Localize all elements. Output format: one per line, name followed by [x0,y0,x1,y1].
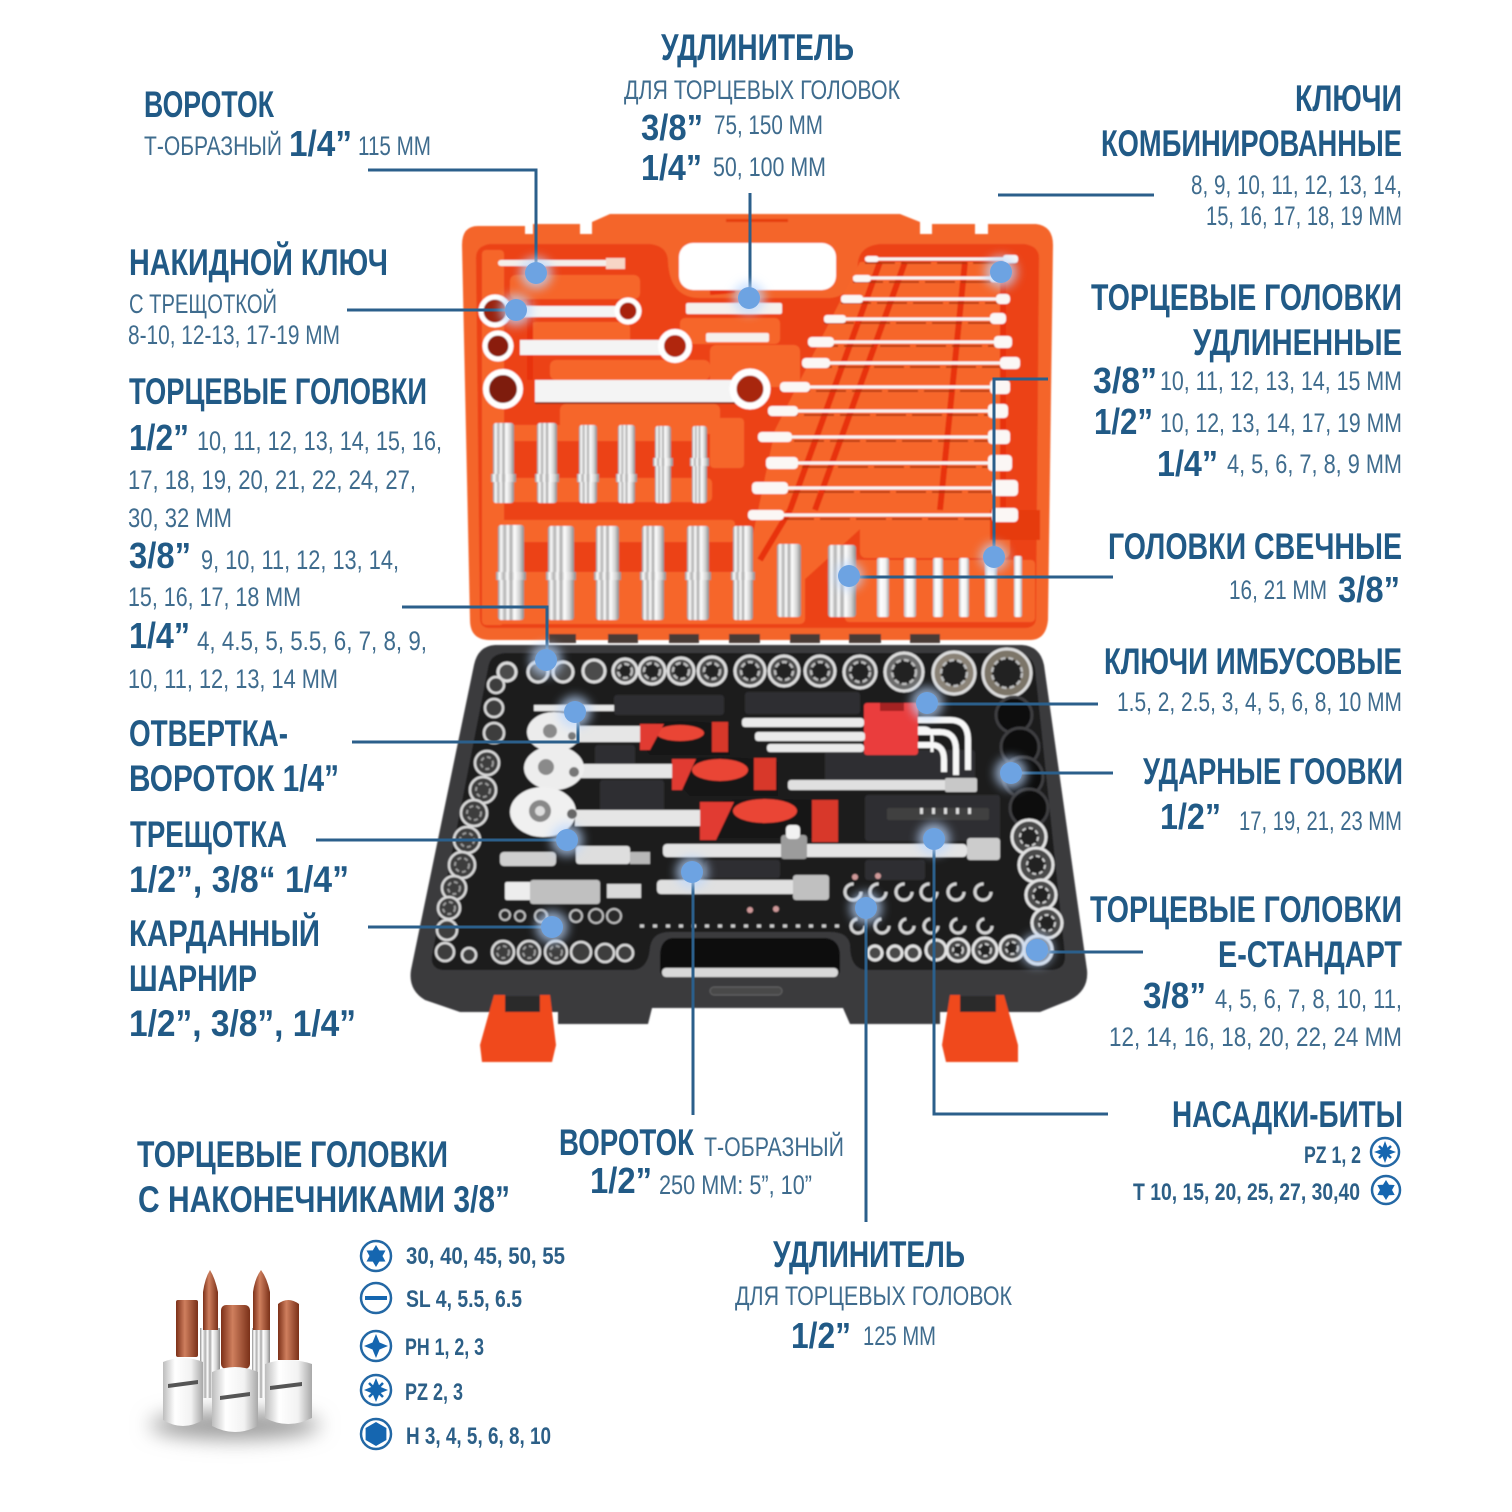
top row sockets [498,649,1031,697]
label: long sockets: 1/4” [1157,443,1218,484]
label: ratchet ring wrench: С ТРЕЩОТКОЙ [129,288,277,319]
label: sockets: 3/8” [129,535,191,576]
label: bits: PZ 1, 2 [1304,1142,1361,1169]
label: long sockets: 10, 12, 13, 14, 17, 19 ММ [1160,408,1402,438]
label: T-handle 1/4: Т-ОБРАЗНЫЙ [144,130,282,161]
label: T-handle 1/4 [144,84,431,164]
row of small bits [640,924,846,928]
label: sockets [128,371,442,694]
hex keys [864,703,968,775]
label: universal joint: 1/2”, 3/8”, 1/4” [129,1003,356,1044]
lid orange foam blocks [482,250,1035,625]
label: ratchet ring wrench: НАКИДНОЙ КЛЮЧ [129,241,388,283]
label: sockets: 10, 11, 12, 13, 14 ММ [128,664,338,694]
label: bit sockets heading [137,1134,510,1220]
label: sockets: 30, 32 ММ [128,503,232,533]
label: hex keys: КЛЮЧИ ИМБУСОВЫЕ [1104,641,1402,682]
label: T-handle 1/2: 1/2” [590,1160,652,1201]
label: long sockets [1091,277,1402,484]
label: spark plug sockets [1108,526,1402,610]
bit sockets photo [150,1270,320,1439]
label: extension bottom [735,1234,1012,1356]
label: long sockets: 1/2” [1094,401,1153,442]
label: extension top: ДЛЯ ТОРЦЕВЫХ ГОЛОВОК [624,75,900,105]
label: long sockets: УДЛИНЕННЫЕ [1193,322,1402,363]
small sockets [500,909,621,923]
label: sockets: 4, 4.5, 5, 5.5, 6, 7, 8, 9, [197,626,427,656]
label: ratchet: ТРЕЩОТКА [130,814,287,855]
label: universal joint: ШАРНИР [129,958,257,999]
label: T-handle 1/2: Т-ОБРАЗНЫЙ [704,1131,844,1162]
label: hex keys [1104,641,1402,717]
label: T-handle 1/2 [559,1122,844,1201]
legend row: torx [361,1241,565,1271]
label: long sockets: 3/8” [1093,360,1157,401]
legend row: pozidriv: PZ 2, 3 [405,1379,463,1406]
orange latches [480,995,1018,1062]
label: extension top: 1/4” [641,147,702,188]
impact sockets [996,697,1048,827]
label: impact sockets: 1/2” [1160,796,1221,837]
label: spark plug sockets: 16, 21 ММ [1229,575,1327,605]
label: E-standard sockets: 12, 14, 16, 18, 20, 22, 24 ММ [1109,1022,1402,1052]
label: ratchet [129,814,349,900]
lid bottom hinge tabs [549,634,940,643]
ratchet ring wrenches [481,297,767,406]
label: ratchet: 1/2”, 3/8“ 1/4” [129,859,349,900]
socket bit holders [845,884,992,933]
label: impact sockets [1143,751,1403,837]
spark plug and small sockets [877,556,1022,617]
icon: pozidriv [1371,1138,1399,1166]
ratchets [510,712,838,842]
connector lines [316,170,1154,1222]
label: impact sockets: УДАРНЫЕ ГООВКИ [1143,751,1403,792]
label: sockets: 17, 18, 19, 20, 21, 22, 24, 27, [128,465,416,495]
lid handle opening [679,243,836,290]
legend row: pozidriv [361,1375,463,1406]
label: bits: T 10, 15, 20, 25, 27, 30,40 [1133,1179,1360,1206]
long sockets upper row [491,423,709,503]
label: E-standard sockets: 3/8” [1143,975,1206,1016]
label: extension bottom: 125 ММ [863,1321,936,1351]
top row socket bores [618,658,1022,688]
label: sockets: 10, 11, 12, 13, 14, 15, 16, [197,426,442,456]
long sockets lower row [496,525,856,620]
label: sockets: 1/2” [129,417,189,458]
lid red grooves [530,262,1003,560]
E-standard sockets [868,820,1062,964]
label: extension top: 3/8” [641,107,703,148]
combination wrenches [748,255,1020,522]
label: extension top [624,27,900,188]
label: extension top: 75, 150 ММ [714,110,823,140]
label: long sockets: 10, 11, 12, 13, 14, 15 ММ [1160,366,1402,396]
label: screwdriver: ВОРОТОК 1/4” [129,758,339,799]
label: T-handle 1/2: 250 ММ: 5”, 10” [659,1170,812,1200]
label: hex keys: 1.5, 2, 2.5, 3, 4, 5, 6, 8, 10 ММ [1117,687,1402,717]
bits block [887,808,989,820]
label: screwdriver: ОТВЕРТКА- [129,713,288,754]
label: E-standard sockets: ТОРЦЕВЫЕ ГОЛОВКИ [1090,889,1402,930]
label: long sockets: ТОРЦЕВЫЕ ГОЛОВКИ [1091,277,1402,318]
label: combination wrenches [1101,78,1402,231]
label: spark plug sockets: 3/8” [1338,569,1400,610]
label: sockets: ТОРЦЕВЫЕ ГОЛОВКИ [129,371,427,412]
label: ratchet ring wrench: 8-10, 12-13, 17-19 ММ [128,320,340,350]
E-standard socket stars [953,828,1055,956]
label: impact sockets: 17, 19, 21, 23 ММ [1239,806,1402,836]
label: sockets: 15, 16, 17, 18 ММ [128,582,301,612]
label: bit sockets heading: С НАКОНЕЧНИКАМИ 3/8” [138,1179,510,1220]
T-handle in lid [498,258,625,269]
legend row: slotted [361,1283,522,1313]
case base: black lower half [411,645,1087,1062]
label: sockets: 1/4” [129,615,190,656]
legend row: phillips [361,1331,484,1361]
label: T-handle 1/4: ВОРОТОК [144,84,274,125]
label: E-standard sockets: Е-СТАНДАРТ [1218,934,1402,975]
label: combination wrenches: 8, 9, 10, 11, 12, 13, 14, [1191,170,1402,200]
label: universal joint: КАРДАННЫЙ [129,912,320,954]
label: bits [1133,1094,1403,1206]
label: extension bottom: ДЛЯ ТОРЦЕВЫХ ГОЛОВОК [735,1281,1012,1311]
label: bits: НАСАДКИ-БИТЫ [1172,1094,1403,1135]
label: E-standard sockets [1090,889,1402,1052]
label: ratchet ring wrench [128,241,388,350]
bit type legend [361,1241,565,1450]
legend row: torx: 30, 40, 45, 50, 55 [406,1243,565,1270]
tool case [411,214,1087,1062]
screwdriver handle [534,705,614,711]
label: extension top: 50, 100 ММ [713,152,826,182]
label: long sockets: 4, 5, 6, 7, 8, 9 ММ [1227,449,1402,479]
label: T-handle 1/4: 1/4” [289,123,352,164]
label: bit sockets heading: ТОРЦЕВЫЕ ГОЛОВКИ [137,1134,448,1175]
label: T-handle 1/4: 115 ММ [358,131,431,161]
legend row: hex [361,1419,551,1450]
legend row: slotted: SL 4, 5.5, 6.5 [406,1286,522,1313]
left and bottom socket rows [436,677,633,963]
universal joints [500,846,650,904]
label: sockets: 9, 10, 11, 12, 13, 14, [201,545,399,575]
label: T-handle 1/2: ВОРОТОК [559,1122,694,1163]
foam blocks [595,692,1000,880]
label: E-standard sockets: 4, 5, 6, 7, 8, 10, 11, [1215,984,1402,1014]
label: combination wrenches: КОМБИНИРОВАННЫЕ [1101,123,1402,164]
callout dots [500,256,1053,966]
sliding and long bars [657,718,1000,900]
label: universal joint [129,912,356,1044]
label: spark plug sockets: ГОЛОВКИ СВЕЧНЫЕ [1108,526,1402,567]
label: extension bottom: УДЛИНИТЕЛЬ [773,1234,965,1275]
legend row: hex: H 3, 4, 5, 6, 8, 10 [406,1423,551,1450]
label: combination wrenches: 15, 16, 17, 18, 19 ММ [1206,201,1402,231]
icon: torx [1372,1176,1400,1204]
label: screwdriver [129,713,339,799]
carry handle [660,938,840,977]
lid extensions [686,303,782,342]
label: extension bottom: 1/2” [791,1315,851,1356]
left socket bores [443,757,562,958]
legend row: phillips: PH 1, 2, 3 [405,1334,484,1361]
case lid: orange upper half [462,214,1053,643]
label: combination wrenches: КЛЮЧИ [1295,78,1402,119]
label: extension top: УДЛИНИТЕЛЬ [661,27,854,68]
